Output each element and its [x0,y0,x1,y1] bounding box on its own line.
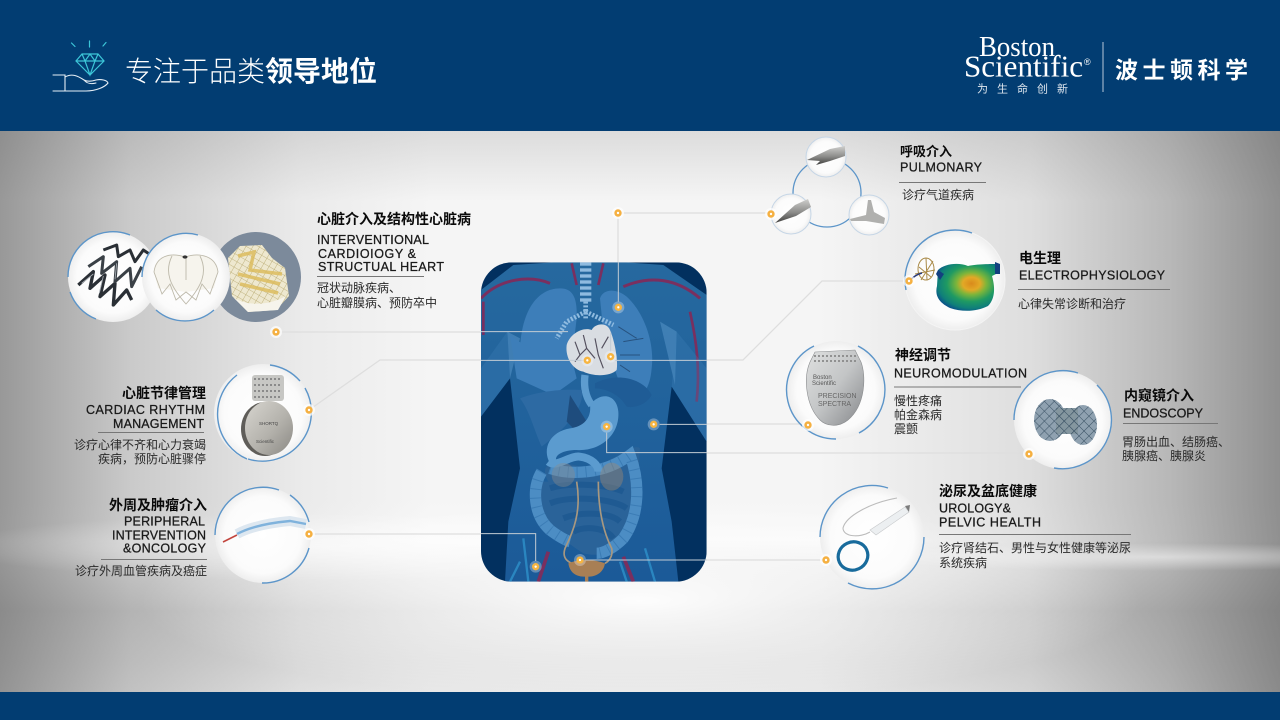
english name: UROLOGY& [939,502,1012,516]
heading: 电生理 [1019,250,1061,266]
heading: 内窥镜介入 [1124,388,1194,404]
heading: 神经调节 [895,347,951,363]
icon: pacemaker: Scientific [256,439,275,444]
description [939,540,1131,570]
description: 胃肠出血、结肠癌、 [1122,434,1230,449]
icon: neurostimulator: Scientific [812,381,836,387]
marker dots [270,207,1035,566]
english name: PELVIC HEALTH [939,516,1041,530]
english name: INTERVENTION [112,528,206,542]
icon: catheter [215,487,311,583]
panel: urology [820,483,1131,589]
description: 帕金森病 [894,407,942,422]
english name [317,233,444,274]
icon: three instrument ring [771,137,889,235]
heading: 泌尿及盆底健康 [939,483,1037,499]
description: 心律失常诊断和治疗 [1018,296,1126,311]
icon: cardiac map [905,230,1005,330]
description: 震颤 [894,422,918,436]
heading: 呼吸介入 [900,144,952,159]
description: 诊疗外周血管疾病及癌症 [75,563,207,578]
logo: Boston Scientific [964,31,1252,96]
panel: electrophysiology [905,230,1170,330]
description: 心脏瓣膜病、预防卒中 [317,295,437,310]
panel: neuromodulation [787,341,1027,439]
english name: NEUROMODULATION [894,366,1027,380]
description: 诊疗心律不齐和心力衰竭 [74,437,206,452]
english name: CARDIOIOGY & [318,247,417,261]
description: 冠状动脉疾病、 [317,280,401,295]
heading: 心脏节律管理 [122,385,206,401]
english name: PULMONARY [900,160,983,174]
english name [112,514,207,556]
heading: 外周及肿瘤介入 [109,497,207,513]
icon: neurostimulator [787,341,885,439]
icon: neurostimulator: SPECTRA [818,401,851,408]
description: 疾病，预防心脏骤停 [98,451,206,466]
panel: peripheral intervention [75,487,311,583]
english name [86,403,205,431]
icon: pacemaker: SHORTQ [259,421,279,426]
english name: ENDOSCOPY [1123,406,1204,420]
icon: neurostimulator: Boston [813,375,832,381]
description: 胰腺癌、胰腺炎 [1122,448,1206,463]
icon: diamond in hand [53,41,108,91]
description [317,280,437,310]
body illustration panel [481,262,707,582]
english name: CARDIAC RHYTHM [86,403,205,417]
panel: interventional cardiology [68,211,471,322]
body marker dots [530,301,660,573]
logo: Boston Scientific: Boston [979,31,1055,63]
english name: MANAGEMENT [113,417,204,431]
english name: INTERVENTIONAL [317,233,429,247]
panel: pulmonary [771,137,986,235]
panel: cardiac rhythm management [74,364,312,466]
english name: &ONCOLOGY [123,542,207,556]
icon: stent [68,232,158,322]
description: 系统疾病 [939,555,987,570]
description [894,393,942,436]
connector lines [276,213,1029,567]
logo: Boston Scientific: Scientific [964,48,1083,84]
title: 专注于品类领导地位 [125,55,377,87]
description: 诊疗肾结石、男性与女性健康等泌尿 [939,540,1131,555]
description [74,437,206,466]
icon: TAVR mesh valve [211,232,301,322]
english name: STRUCTUAL HEART [318,260,444,274]
description: 诊疗气道疾病 [902,187,974,202]
icon: mesh stent [1014,371,1112,469]
icon: neurostimulator: PRECISION [818,393,857,400]
logo: Boston Scientific: 为生命创新 [977,82,1077,96]
description [1122,434,1230,463]
icon: pacemaker [214,364,312,462]
icon: valve frame [142,233,230,321]
logo: Boston Scientific: ® [1084,57,1091,67]
english name: PERIPHERAL [124,514,205,528]
icon: guide device and coil [820,485,924,589]
panel: endoscopy [1014,371,1230,469]
heading: 心脏介入及结构性心脏病 [317,211,471,227]
description: 慢性疼痛 [894,393,942,408]
english name [939,502,1041,530]
logo: Boston Scientific: 波士顿科学 [1115,57,1252,83]
english name: ELECTROPHYSIOLOGY [1019,268,1166,282]
